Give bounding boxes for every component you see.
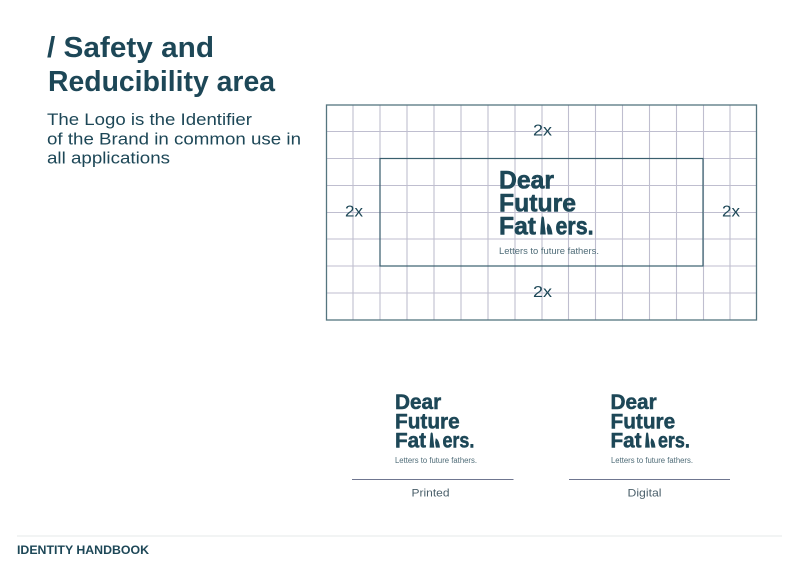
digital logo: Fat [610,430,642,453]
main logo: Fat [499,212,537,240]
digital tagline: Letters to future fathers. [611,456,693,465]
printed logo [395,391,474,453]
title: Reducibility area [48,66,276,98]
digital logo version [569,391,730,500]
main logo [499,166,599,257]
inner logo boundary [380,158,703,266]
digital label: Digital [628,488,662,500]
main logo: ers. [556,212,594,240]
digital rule [569,478,730,480]
safety area diagram [326,105,757,320]
printed logo version [352,391,514,500]
title: / Safety and [47,32,214,64]
printed rule [352,478,514,480]
printed logo: Dear [395,391,441,414]
main logo: Dear [499,166,554,194]
tagline: Letters to future fathers. [499,246,599,257]
intro text block: all applications [47,150,170,168]
printed logo: ers. [442,430,474,453]
digital logo: Dear [610,391,657,414]
printed logo: Future [395,410,460,433]
digital logo [610,391,690,453]
intro text block: The Logo is the Identifier [47,111,253,129]
main logo: Future [499,190,576,218]
icon: father and child [540,216,552,234]
intro text block: of the Brand in common use in [47,130,301,148]
printed logo: Fat [395,430,426,453]
grid lines [326,105,757,320]
footer: IDENTITY HANDBOOK [17,545,150,557]
icon: father and child [645,433,655,448]
digital logo: ers. [658,430,690,453]
printed tagline: Letters to future fathers. [395,456,477,465]
outer boundary [326,105,756,320]
digital logo: Future [610,410,675,433]
label: left margin: 2x [345,204,363,220]
label: right margin: 2x [722,204,740,220]
printed label: Printed [412,488,450,500]
label: top margin: 2x [533,122,552,140]
intro text block [47,111,301,168]
label: bottom margin: 2x [533,284,552,301]
title [47,32,276,98]
icon: father and child [430,433,440,448]
